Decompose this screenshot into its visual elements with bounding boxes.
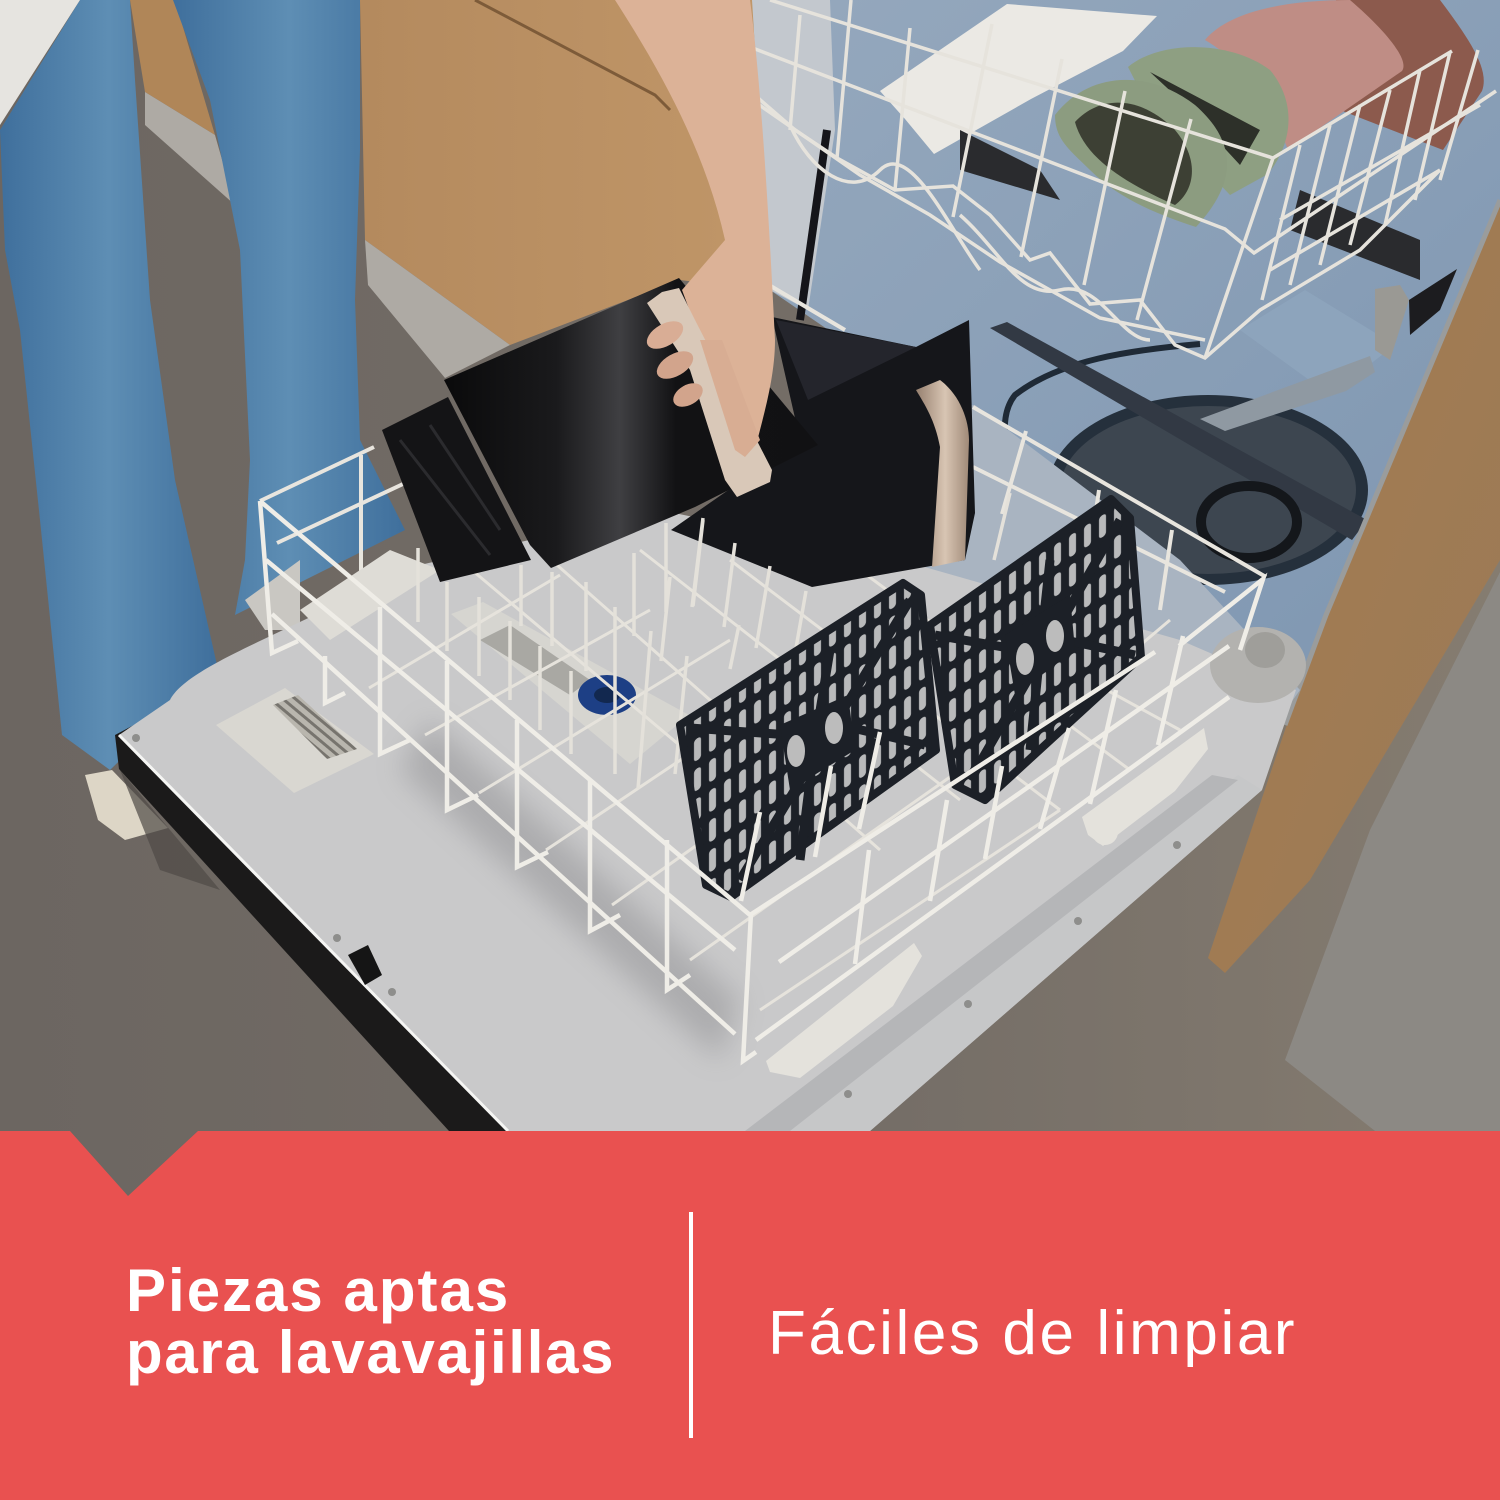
wood cabinet <box>130 0 760 345</box>
door front strip <box>760 775 1262 1131</box>
tub left wall <box>752 0 835 310</box>
grill basket left <box>680 583 936 897</box>
air fryer body <box>382 278 975 587</box>
upper rack wires <box>745 0 1496 358</box>
heading: Piezas aptas para lavavajillas: para lavavajillas <box>126 1319 615 1386</box>
upper rack dishes <box>880 0 1484 360</box>
arm and hand <box>615 0 775 497</box>
door screws <box>132 734 1181 1098</box>
rack back wires <box>260 285 1266 610</box>
rack tines <box>418 493 1010 789</box>
rack front wires <box>260 501 1263 1061</box>
floater knob <box>1210 627 1306 703</box>
door inner liner <box>119 510 1296 1131</box>
rack shadow <box>400 720 740 1060</box>
rack rollers <box>766 728 1208 1078</box>
rear rack roller <box>300 550 440 640</box>
wood open panel right <box>1208 200 1500 973</box>
rack floor grid <box>369 550 1180 1010</box>
door black edge <box>115 706 510 1131</box>
latch <box>348 945 382 985</box>
banner: red footer <box>0 1131 1500 1500</box>
jeans <box>0 0 405 840</box>
grill basket right <box>930 499 1141 800</box>
stainless appliance right <box>1285 572 1500 1131</box>
detergent dispenser <box>451 602 689 764</box>
dishwasher tub interior <box>755 0 1500 690</box>
lower spray assembly <box>990 290 1395 585</box>
heading: Piezas aptas para lavavajillas: Piezas aptas <box>126 1257 510 1324</box>
tub floor behind rack <box>760 405 1300 760</box>
vent <box>216 688 374 793</box>
door rim highlight <box>119 735 508 1131</box>
baseboard <box>145 92 510 378</box>
power cord <box>800 130 827 320</box>
door shadow on floor <box>120 770 220 890</box>
subheading: Fáciles de limpiar: Fáciles de limpiar <box>768 1299 1297 1368</box>
